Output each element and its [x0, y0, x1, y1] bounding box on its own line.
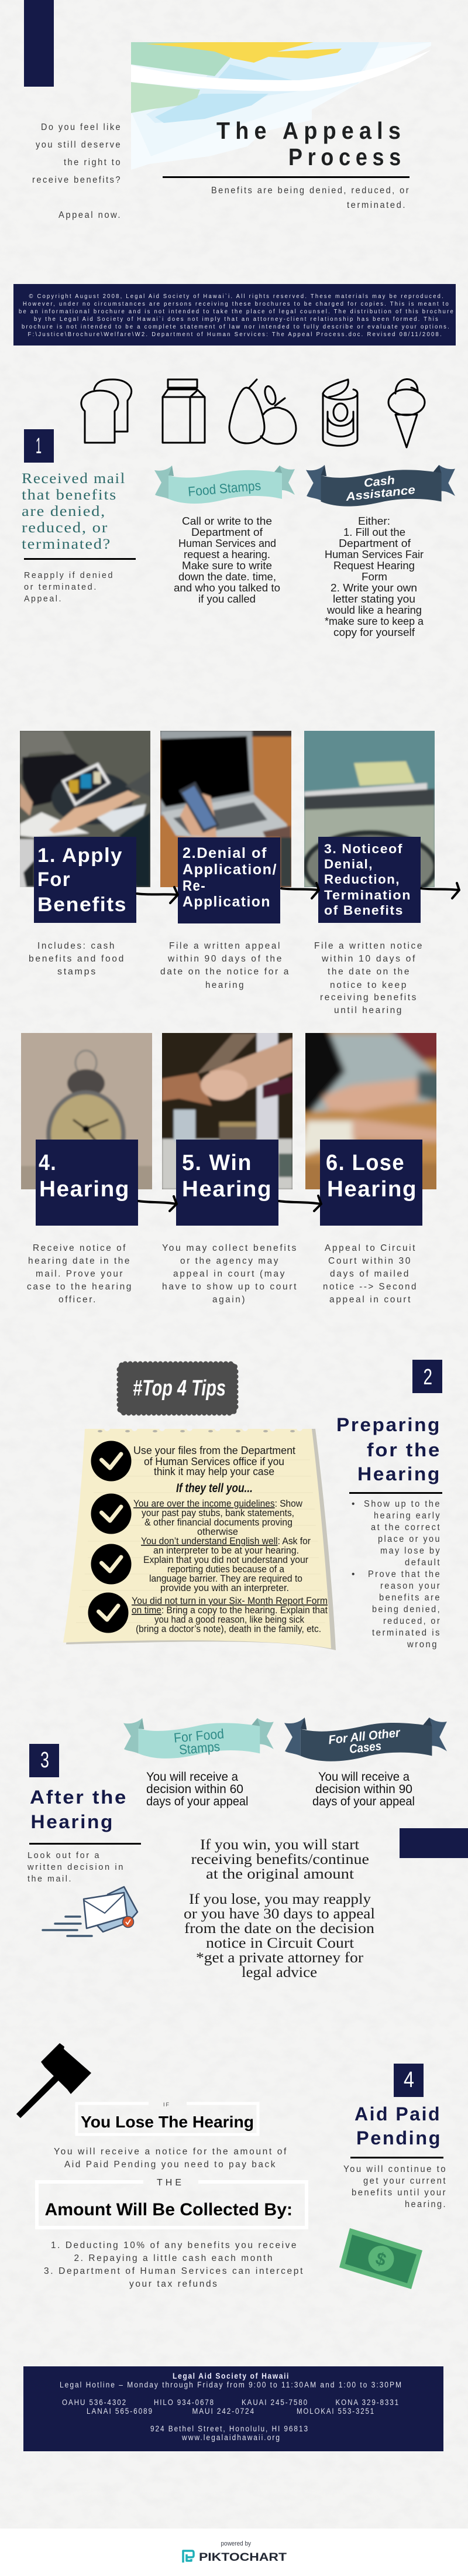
continue benefits note: hearing. [405, 2199, 447, 2209]
intro question: you still deserve [36, 140, 122, 150]
step 4 description: hearing date in the [28, 1256, 131, 1266]
footer contact panel: Legal Aid Society of Hawaii [173, 2371, 290, 2380]
tip: english: an interpreter to be at your hearing. [153, 1545, 299, 1556]
copyright panel: be an informational brochure and is not intended to take the place of legal counsel. The distribution of this brochure [19, 309, 455, 315]
footer contact panel: HILO 934-0678 [154, 2398, 215, 2407]
other cases decision time [312, 1770, 415, 1808]
badge: top 4 tips [118, 1363, 237, 1414]
win and lose outcome text: or you have 30 days to appeal [184, 1906, 375, 1922]
step 5 description: or the agency may [180, 1256, 280, 1266]
intro question: receive benefits? [32, 175, 122, 185]
copyright panel: F:\Justice\Brochure\Welfare\W2. Department of Human Services: The Appeal Process.doc. Revised 08/11/2008. [28, 331, 443, 338]
food stamps instructions: Call or write to the [182, 515, 272, 527]
step 2 card: Re- [183, 878, 206, 894]
preparing bullet list: wrong [407, 1640, 438, 1650]
photo: laptop meeting [18, 728, 153, 890]
cash assistance instructions: Request Hearing [333, 560, 415, 572]
food stamps instructions: request a hearing. [184, 549, 270, 560]
aid paid pending notice [54, 2147, 288, 2170]
footer contact panel: KONA 329-8331 [336, 2398, 400, 2407]
tip: use your files [133, 1445, 295, 1477]
step 5 card: 5. Win [182, 1151, 252, 1175]
title rule [163, 176, 410, 178]
title: Process [288, 143, 406, 170]
step 4 description: Receive notice of [33, 1243, 127, 1253]
food stamps decision time: You will receive a [146, 1770, 238, 1784]
step 1 description: stamps [57, 967, 97, 977]
frame: if you lose the hearing [77, 2102, 258, 2134]
rule section 3 [29, 1843, 141, 1845]
arrow 5 to 6 [279, 1196, 321, 1211]
step 6 description: appeal in court [329, 1295, 412, 1305]
cash assistance instructions: Either: [358, 515, 390, 527]
copyright panel: brochure is not intended to be a complete statement of law nor intended to fully describe or evaluate your options. [22, 324, 450, 330]
step 4 description [27, 1243, 133, 1305]
continue benefits note: benefits until your [352, 2188, 447, 2198]
title [216, 117, 406, 170]
step 3 card: Denial, [324, 857, 373, 871]
win and lose outcome text: receiving benefits/continue [191, 1852, 369, 1867]
heading: received mail: that benefits [22, 487, 117, 503]
section number 1 [24, 429, 54, 463]
footer contact panel: OAHU 536-4302 [62, 2398, 127, 2407]
step 3 card: Reduction, [324, 872, 400, 887]
heading: after the hearing: After the [30, 1787, 128, 1808]
tip: use your files: Use your files from the Department [133, 1445, 295, 1456]
step 3 description [314, 941, 424, 1015]
win and lose outcome text: If you lose, you may reapply [189, 1891, 371, 1907]
heading: received mail [22, 471, 126, 552]
ribbon: food stamps [154, 466, 295, 504]
step 6 description: Appeal to Circuit [325, 1243, 417, 1253]
icon: bread [81, 379, 132, 443]
cash assistance instructions: would like a hearing [326, 604, 422, 616]
aid paid pending notice: Aid Paid Pending you need to pay back [64, 2160, 277, 2170]
cash assistance instructions: Form [362, 571, 387, 583]
section number 2: 2 [424, 1365, 432, 1390]
arrow 2 to 3 [281, 883, 319, 898]
food stamps instructions [174, 515, 280, 605]
frame: if you lose the hearing: You Lose The Hearing [81, 2113, 254, 2131]
preparing bullet list: default [405, 1558, 441, 1568]
step 6 card: 6. Lose [326, 1151, 405, 1175]
food stamps instructions: down the date. time, [178, 571, 276, 583]
icon: dollar bill: $ [373, 2249, 388, 2270]
frame: the amount will be collected by: THE [157, 2178, 184, 2188]
other cases decision time: You will receive a [318, 1770, 410, 1784]
preparing bullet list: may lose by [380, 1546, 441, 1556]
step 3 description: receiving benefits [320, 993, 418, 1003]
heading: preparing for the hearing: for the [367, 1439, 441, 1460]
photo: writing hand [305, 1033, 436, 1189]
step 4 description: case to the hearing [27, 1282, 133, 1292]
title: The Appeals [216, 117, 406, 144]
ribbon: for all other cases: Cases [349, 1739, 382, 1756]
ribbon: cash assistance [306, 465, 455, 507]
step 2 description [160, 941, 290, 990]
section number 4 [394, 2064, 424, 2097]
heading: aid paid pending: Aid Paid [355, 2103, 441, 2125]
win and lose outcome text: from the date on the decision [184, 1921, 375, 1937]
preparing bullet list [352, 1499, 441, 1650]
heading: received mail: Received mail [22, 471, 126, 487]
preparing bullet list: Show up to the [364, 1499, 441, 1509]
step 3 card [318, 837, 421, 923]
preparing bullet list: being denied, [372, 1605, 441, 1614]
step 1 card [34, 837, 136, 923]
tip: english: language barrier. They are required to [149, 1573, 302, 1584]
step 5 description: You may collect benefits [162, 1243, 298, 1253]
step 3 description: notice to keep [330, 980, 408, 990]
icon: envelope [43, 1887, 137, 1936]
food stamps instructions: Department of [191, 526, 263, 538]
copyright panel: However, under no circumstances are persons receiving these brochures to be charged for copies. This is meant to [23, 301, 450, 307]
step 2 description: date on the notice for a [160, 967, 290, 977]
icon: gavel [16, 2043, 91, 2118]
tip: income guidelines [133, 1499, 302, 1537]
step 3 description: until hearing [334, 1005, 403, 1015]
reapply note: or terminated. [24, 583, 98, 592]
heading: preparing for the hearing: Hearing [357, 1463, 441, 1484]
continue benefits note [343, 2164, 447, 2209]
food stamps decision time: days of your appeal [146, 1795, 248, 1808]
ribbon: for all other cases: For All Other [328, 1726, 402, 1747]
cash assistance instructions: Human Services Fair [325, 549, 424, 560]
win and lose outcome text: *get a private attorney for [196, 1950, 364, 1966]
copyright panel: by the Legal Aid Society of Hawai`i does not imply that an attorney-client relationship has been formed. This [34, 316, 439, 323]
heading: after the hearing: Hearing [30, 1811, 114, 1832]
arrow 4 to 5 [139, 1196, 177, 1211]
cash assistance instructions: Department of [339, 538, 411, 549]
cash assistance instructions: letter stating you [333, 593, 415, 605]
tip: english: provide you with an interpreter. [160, 1583, 289, 1593]
step 2 card: Application [183, 894, 271, 910]
intro question: the right to [64, 158, 122, 167]
section number 3 [29, 1744, 59, 1777]
tip: income guidelines: otherwise [197, 1527, 238, 1537]
footer contact panel: MAUI 242-0724 [192, 2407, 255, 2416]
collection methods list: 1. Deducting 10% of any benefits you receive [51, 2240, 298, 2250]
heading: after the hearing [30, 1787, 128, 1832]
food stamps instructions: and who you talked to [174, 582, 280, 594]
ribbon: for food stamps [123, 1718, 274, 1759]
step 2 card: Application/ [183, 861, 277, 878]
heading: aid paid pending: Pending [356, 2127, 442, 2149]
ribbon: for food stamps: Stamps [178, 1739, 221, 1757]
win and lose outcome text: notice in Circuit Court [206, 1935, 354, 1951]
step 1 card: Benefits [37, 894, 127, 916]
subtitle [211, 186, 410, 210]
win and lose outcome text: legal advice [242, 1965, 317, 1980]
step 1 description: Includes: cash [37, 941, 116, 951]
step 3 description: within 10 days of [321, 954, 417, 964]
cash assistance instructions [325, 515, 424, 638]
tip: six-month report: on time: Bring a copy to the hearing. Explain that [132, 1605, 328, 1616]
preparing bullet list: • [352, 1569, 356, 1579]
tip: six-month report [132, 1596, 328, 1634]
heading: received mail: reduced, or [22, 520, 108, 536]
step 6 card [320, 1140, 422, 1226]
step 2 card [178, 837, 280, 923]
frame: the amount will be collected by [37, 2178, 307, 2228]
frame: if you lose the hearing: IF [163, 2102, 170, 2108]
footer contact panel: 924 Bethel Street, Honolulu, HI 96813 [150, 2424, 309, 2433]
tip: english: reporting duties because of a [167, 1564, 285, 1575]
preparing bullet list: place or you [378, 1534, 441, 1544]
footer contact panel: LANAI 565-6089 [87, 2407, 153, 2416]
food stamps instructions: Human Services and [178, 538, 276, 549]
preparing bullet list: Prove that the [368, 1569, 441, 1579]
preparing bullet list: reduced, or [383, 1616, 441, 1626]
arrow 3 onward [421, 883, 459, 898]
written decision note [27, 1851, 125, 1884]
step 4 description: officer. [58, 1295, 97, 1305]
cash assistance instructions: 2. Write your own [331, 582, 417, 594]
collection methods list [44, 2240, 304, 2289]
reapply note: Reapply if denied [24, 571, 114, 580]
step 3 description: the date on the [328, 967, 411, 977]
check icon 4 [88, 1593, 129, 1633]
step 3 description: File a written notice [314, 941, 424, 951]
ribbon: cash assistance: Cash [363, 474, 395, 490]
rule section 1 [24, 558, 136, 560]
navy side tab [400, 1828, 468, 1858]
subtitle: terminated. [347, 200, 407, 210]
preparing bullet list: hearing early [374, 1511, 441, 1521]
step 1 card: For [37, 868, 71, 891]
footer contact panel: KAUAI 245-7580 [242, 2398, 308, 2407]
tip: income guidelines: your past pay stubs, bank statements, [142, 1508, 294, 1518]
continue benefits note: get your current [363, 2176, 447, 2186]
preparing bullet list: at the correct [371, 1523, 441, 1532]
tip: use your files: think it may help your case [154, 1466, 274, 1477]
written decision note: the mail. [27, 1874, 73, 1884]
step 3 card: of Benefits [324, 903, 404, 918]
reapply note [24, 571, 114, 604]
preparing bullet list: reason your [380, 1581, 441, 1591]
continue benefits note: You will continue to [343, 2164, 447, 2174]
notepaper panel [63, 1425, 336, 1650]
food stamps decision time [146, 1770, 248, 1808]
written decision note: Look out for a [27, 1851, 101, 1860]
tip: six-month report: You did not turn in your Six- Month Report Form [132, 1596, 328, 1606]
step 1 description: benefits and food [29, 954, 125, 964]
footer contact panel: Legal Hotline – Monday through Friday from 9:00 to 11:30AM and 1:00 to 3:30PM [60, 2380, 402, 2389]
step 3 card: 3. Noticeof [324, 841, 403, 856]
heading: preparing for the hearing [336, 1414, 441, 1484]
powered by piktochart: PIKTOCHART [199, 2551, 287, 2564]
check icon 3 [91, 1544, 131, 1585]
ribbon: cash assistance: Assistance [345, 484, 416, 504]
section number 1: 1 [36, 434, 42, 459]
step 3 card: Termination [324, 888, 411, 902]
step 1 card: 1. Apply [37, 844, 123, 867]
photo: phone and laptop [158, 728, 294, 890]
cash assistance instructions: 1. Fill out the [343, 526, 405, 538]
step 6 description: days of mailed [330, 1269, 410, 1279]
collection methods list: 3. Department of Human Services can intercept [44, 2266, 304, 2276]
step 2 description: hearing [205, 980, 245, 990]
step 4 description: mail. Prove your [36, 1269, 124, 1279]
food stamps instructions: Make sure to write [182, 560, 272, 572]
heading: preparing for the hearing: Preparing [336, 1414, 441, 1435]
footer contact panel: MOLOKAI 553-3251 [297, 2407, 375, 2416]
arrow 1 to 2 [137, 887, 178, 903]
badge: top 4 tips: #Top 4 Tips [133, 1376, 226, 1401]
written decision note: written decision in [27, 1863, 125, 1872]
heading: received mail: are denied, [22, 504, 106, 519]
icon: dollar bill [339, 2228, 422, 2289]
intro question [32, 122, 122, 220]
icon: can [323, 379, 357, 446]
step 2 card: 2.Denial of [183, 845, 267, 861]
win and lose outcome text: If you win, you will start [200, 1837, 359, 1853]
reapply note: Appeal. [24, 594, 63, 604]
collection methods list: your tax refunds [129, 2279, 219, 2289]
step 5 description [162, 1243, 298, 1305]
photo: desk note and map [304, 731, 435, 887]
rule section 4 [350, 2157, 443, 2158]
icon: milk carton [163, 379, 205, 443]
heading: received mail: terminated? [22, 536, 111, 552]
check icon 1 [91, 1441, 131, 1482]
preparing bullet list: benefits are [379, 1593, 441, 1603]
aid paid pending notice: You will receive a notice for the amount of [54, 2147, 288, 2157]
step 5 description: have to show up to court [162, 1282, 298, 1292]
win and lose outcome text [184, 1837, 375, 1980]
step 2 description: within 90 days of the [167, 954, 283, 964]
cash assistance instructions: *make sure to keep a [325, 615, 424, 627]
copyright panel [13, 284, 456, 345]
step 6 description: notice --> Second [323, 1282, 418, 1292]
watercolor map image [131, 42, 431, 170]
tip: income guidelines: You are over the income guidelines: Show [133, 1499, 302, 1509]
check icon 2 [91, 1493, 131, 1534]
food stamps instructions: if you called [198, 593, 256, 605]
other cases decision time: days of your appeal [312, 1795, 415, 1808]
intro question: Do you feel like [41, 122, 122, 132]
subtitle: Benefits are being denied, reduced, or [211, 186, 410, 196]
step 4 card: Hearing [39, 1177, 130, 1202]
frame: the amount will be collected by: Amount Will Be Collected By: [44, 2200, 292, 2219]
tip: english [141, 1536, 311, 1593]
footer contact panel [23, 2366, 443, 2451]
step 2 description: File a written appeal [169, 941, 281, 951]
ribbon: for all other cases [284, 1718, 447, 1761]
photo: fist bump [160, 1031, 295, 1192]
tip: six-month report: (bring a doctor’s note), death in the family, etc. [136, 1624, 321, 1634]
collection methods list: 2. Repaying a little cash each month [74, 2253, 274, 2263]
step 5 card: Hearing [182, 1177, 272, 1202]
icon: ice cream [388, 379, 425, 447]
section number 3: 3 [40, 1748, 49, 1773]
cash assistance instructions: copy for yourself [333, 627, 415, 638]
tip: six-month report: you had a good reason, like being sick [154, 1614, 305, 1625]
win and lose outcome text: at the original amount [206, 1866, 354, 1882]
icon: pear and apple [229, 379, 296, 444]
step 5 description: again) [212, 1295, 246, 1305]
step 5 card [176, 1140, 278, 1226]
preparing bullet list: • [352, 1499, 356, 1509]
section number 2 [412, 1360, 442, 1393]
step 4 card: 4. [39, 1151, 57, 1175]
section number 4: 4 [404, 2068, 414, 2092]
rule section 2 [349, 1492, 442, 1494]
tip: english: Explain that you did not understand your [143, 1555, 308, 1565]
intro question: Appeal now. [58, 210, 122, 220]
heading: aid paid pending [355, 2103, 442, 2149]
preparing bullet list: terminated is [372, 1628, 441, 1638]
top navy tab [24, 0, 54, 87]
tip: use your files: of Human Services office if you [144, 1456, 284, 1467]
powered by piktochart [183, 2540, 287, 2564]
tip: income guidelines: & other financial documents proving [144, 1517, 292, 1528]
ribbon: for food stamps: For Food [173, 1726, 225, 1746]
food stamps decision time: decision within 60 [146, 1783, 243, 1796]
step 6 description [323, 1243, 418, 1305]
other cases decision time: decision within 90 [315, 1783, 412, 1796]
step 6 description: Court within 30 [328, 1256, 412, 1266]
photo: alarm clock [19, 1031, 154, 1192]
tip: english: You don’t understand English well: Ask for [141, 1536, 311, 1547]
step 6 card: Hearing [327, 1177, 417, 1202]
copyright panel: © Copyright August 2008, Legal Aid Society of Hawai`i. All rights reserved. These materials may be reproduced. [29, 293, 445, 300]
footer contact panel: www.legalaidhawaii.org [181, 2433, 281, 2442]
powered by piktochart: powered by [221, 2540, 251, 2547]
step 1 description [29, 941, 125, 977]
subheading: if they tell you: If they tell you... [176, 1482, 253, 1495]
step 5 description: appeal in court (may [173, 1269, 286, 1279]
step 4 card [36, 1140, 138, 1226]
ribbon: food stamps: Food Stamps [187, 478, 261, 499]
